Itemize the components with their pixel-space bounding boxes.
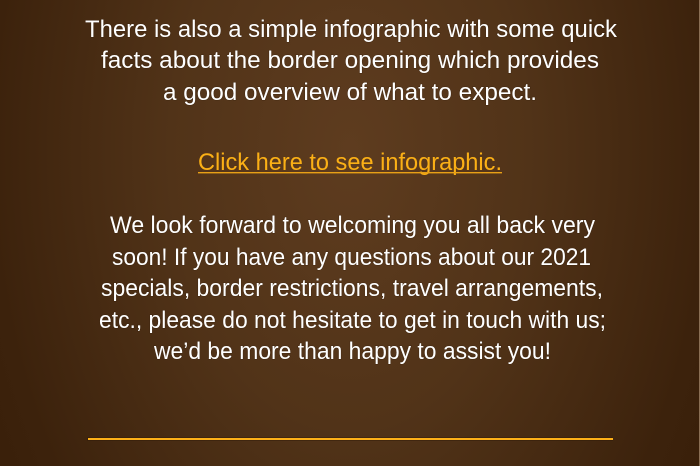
closing paragraph: etc., please do not hesitate to get in touch with us;: [99, 307, 606, 334]
closing paragraph: soon! If you have any questions about our 2021: [112, 244, 591, 271]
closing paragraph: specials, border restrictions, travel arrangements,: [101, 275, 603, 302]
intro paragraph: There is also a simple infographic with some quick: [85, 16, 618, 43]
closing paragraph: we’d be more than happy to assist you!: [153, 338, 551, 365]
intro paragraph: a good overview of what to expect.: [163, 79, 537, 106]
gold divider line: [87, 437, 613, 441]
closing paragraph: We look forward to welcoming you all back very: [110, 212, 595, 239]
infographic link: Click here to see infographic.: [198, 149, 502, 176]
intro paragraph: facts about the border opening which provides: [101, 47, 599, 74]
right edge highlight: [699, 0, 700, 466]
intro paragraph: [85, 16, 618, 106]
closing paragraph: [99, 212, 606, 365]
